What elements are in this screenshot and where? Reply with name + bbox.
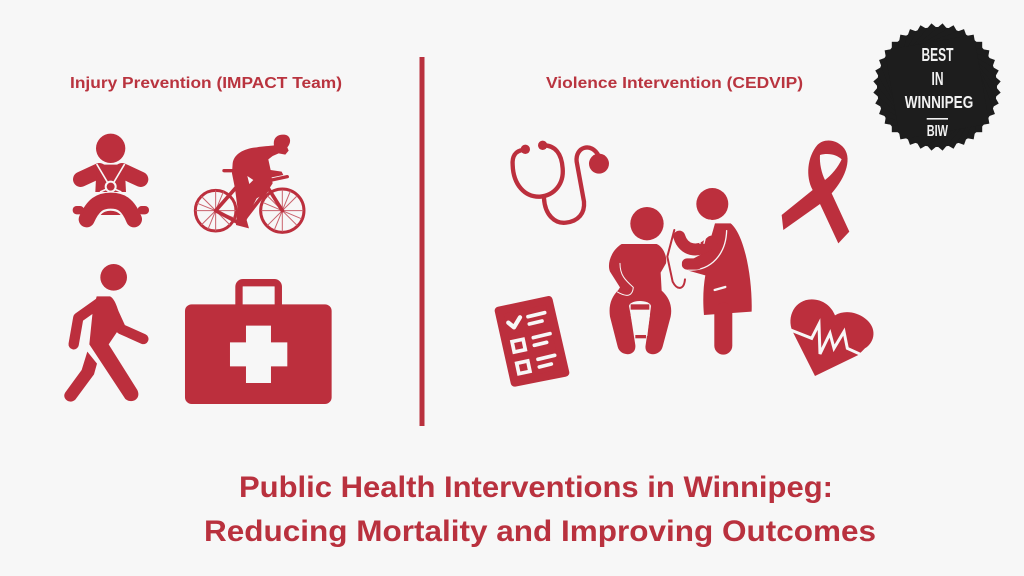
icon: walking person bbox=[64, 264, 143, 402]
badge: Best in Winnipeg: BIW bbox=[927, 123, 948, 140]
icon: doctor taking patient's blood pressure bbox=[609, 188, 752, 354]
heading: Injury Prevention: Injury Prevention (IMPACT Team) bbox=[70, 75, 342, 92]
badge: Best in Winnipeg bbox=[873, 23, 1001, 151]
patient bbox=[609, 207, 671, 354]
doctor bbox=[679, 188, 752, 346]
icon: baby in car seat harness bbox=[73, 134, 149, 219]
icon: first aid kit bbox=[185, 283, 332, 404]
vertical divider bbox=[420, 57, 424, 426]
badge: Best in Winnipeg: IN bbox=[932, 69, 944, 89]
icon: heart with pulse line bbox=[790, 299, 874, 376]
icon: stethoscope bbox=[513, 141, 609, 223]
heading: Violence Intervention: Violence Intervention (CEDVIP) bbox=[546, 75, 803, 92]
badge: Best in Winnipeg: WINNIPEG bbox=[905, 92, 973, 112]
icon: checklist clipboard bbox=[499, 300, 565, 383]
badge: Best in Winnipeg: BEST bbox=[922, 45, 954, 65]
icon: cyclist bbox=[195, 135, 304, 232]
title: Public Health Interventions in Winnipeg: bbox=[239, 471, 833, 504]
title bbox=[204, 471, 876, 548]
icon: awareness ribbon bbox=[782, 140, 849, 243]
blood pressure cuff bbox=[665, 256, 682, 278]
title: Reducing Mortality and Improving Outcomes bbox=[204, 515, 876, 548]
